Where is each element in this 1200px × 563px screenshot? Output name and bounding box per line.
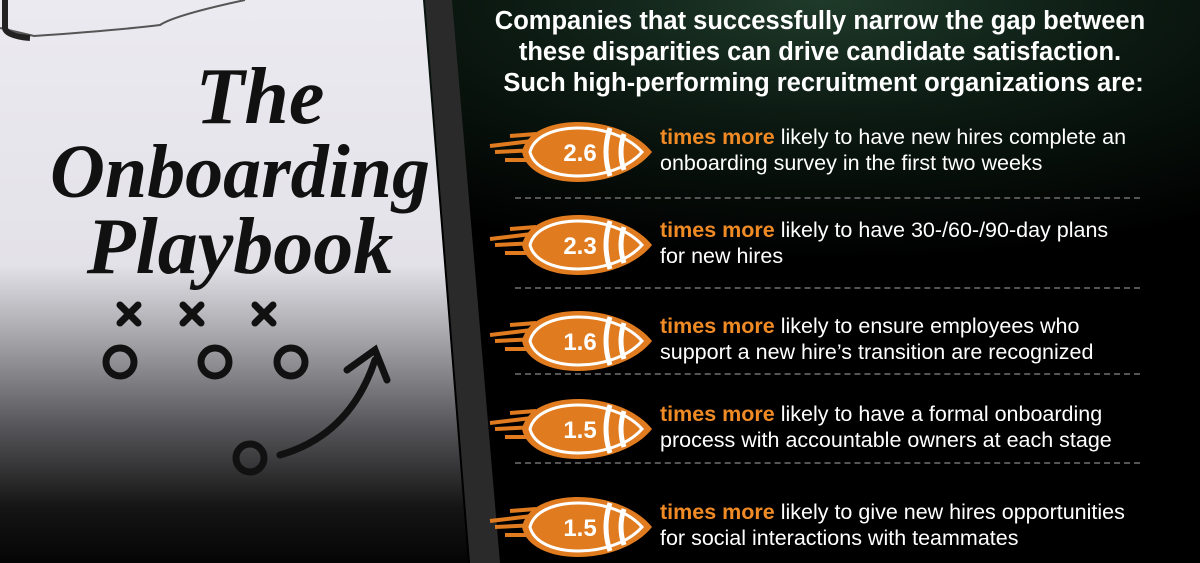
clipboard and paper — [0, 0, 500, 563]
item 5 — [490, 497, 1125, 557]
item 2: for new hires — [660, 244, 783, 268]
title: The Onboarding Playbook — [50, 53, 430, 291]
item 3 — [490, 311, 1093, 371]
item 5: for social interactions with teammates — [660, 526, 1018, 550]
item 2 — [490, 215, 1108, 275]
item 4: process with accountable owners at each stage — [660, 428, 1112, 452]
title: The Onboarding Playbook: Onboarding — [50, 130, 430, 214]
title: The Onboarding Playbook: Playbook — [87, 203, 393, 291]
item 4: times more likely to have a formal onboarding — [660, 402, 1102, 426]
heading — [495, 7, 1145, 97]
item 3: 1.6 — [563, 329, 597, 356]
item 1: times more likely to have new hires complete an onboarding survey in the first two weeks — [660, 125, 1126, 175]
item 2: 2.3 — [563, 233, 597, 260]
item 5: times more likely to give new hires opportunities — [660, 500, 1125, 524]
item 2: times more likely to have 30-/60-/90-day plans — [660, 218, 1108, 242]
item 3: support a new hire’s transition are recognized — [660, 340, 1093, 364]
item 4: 1.5 — [563, 417, 597, 444]
heading: Such high-performing recruitment organizations are: — [503, 69, 1144, 97]
item 5: 1.5 — [563, 515, 597, 542]
heading: these disparities can drive candidate satisfaction. — [519, 38, 1121, 66]
title: The Onboarding Playbook: The — [196, 53, 324, 141]
item 3: times more likely to ensure employees who — [660, 314, 1079, 338]
item 4 — [490, 399, 1112, 459]
heading: Companies that successfully narrow the gap between — [495, 7, 1145, 35]
play diagram — [102, 302, 390, 476]
item 1: 2.6 — [563, 140, 597, 167]
item 1 — [490, 122, 1126, 182]
